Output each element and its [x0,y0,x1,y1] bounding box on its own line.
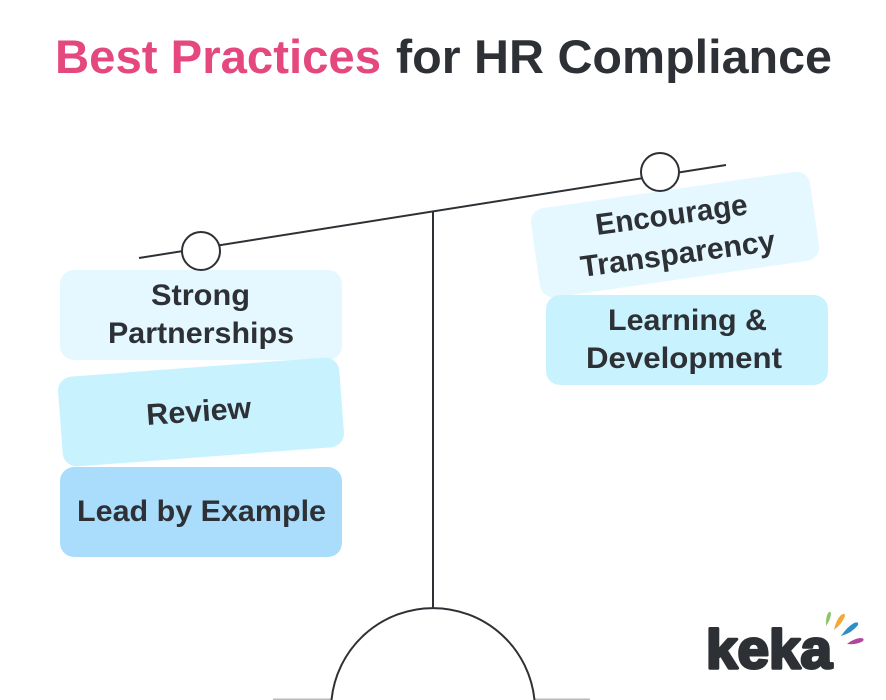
card: Encourage Transparency [529,170,821,299]
scale post [432,211,434,608]
logo: keka: keka [706,618,832,680]
scale base line [273,698,590,700]
title: for HR Compliance [396,30,832,83]
icon: logo rays [826,612,864,644]
title [55,30,832,83]
card: Strong Partnerships: Strong [151,279,250,312]
card: Learning & Development: Development [586,342,782,375]
card: Encourage Transparency: Encourage [593,188,750,242]
card: Strong Partnerships: Partnerships [108,317,294,350]
scale dome [332,608,534,700]
right pivot circle [641,153,679,191]
card: Review: Review [145,392,253,432]
card: Learning & Development: Learning & [608,304,767,337]
card: Strong Partnerships [60,270,342,360]
card: Lead by Example [60,467,342,557]
card: Review [57,357,345,467]
card: Encourage Transparency: Transparency [578,225,777,284]
title: Best Practices [55,30,381,83]
card: Learning & Development [546,295,828,385]
left pivot circle [182,232,220,270]
card: Lead by Example: Lead by Example [77,495,326,528]
scale beam [139,165,726,258]
